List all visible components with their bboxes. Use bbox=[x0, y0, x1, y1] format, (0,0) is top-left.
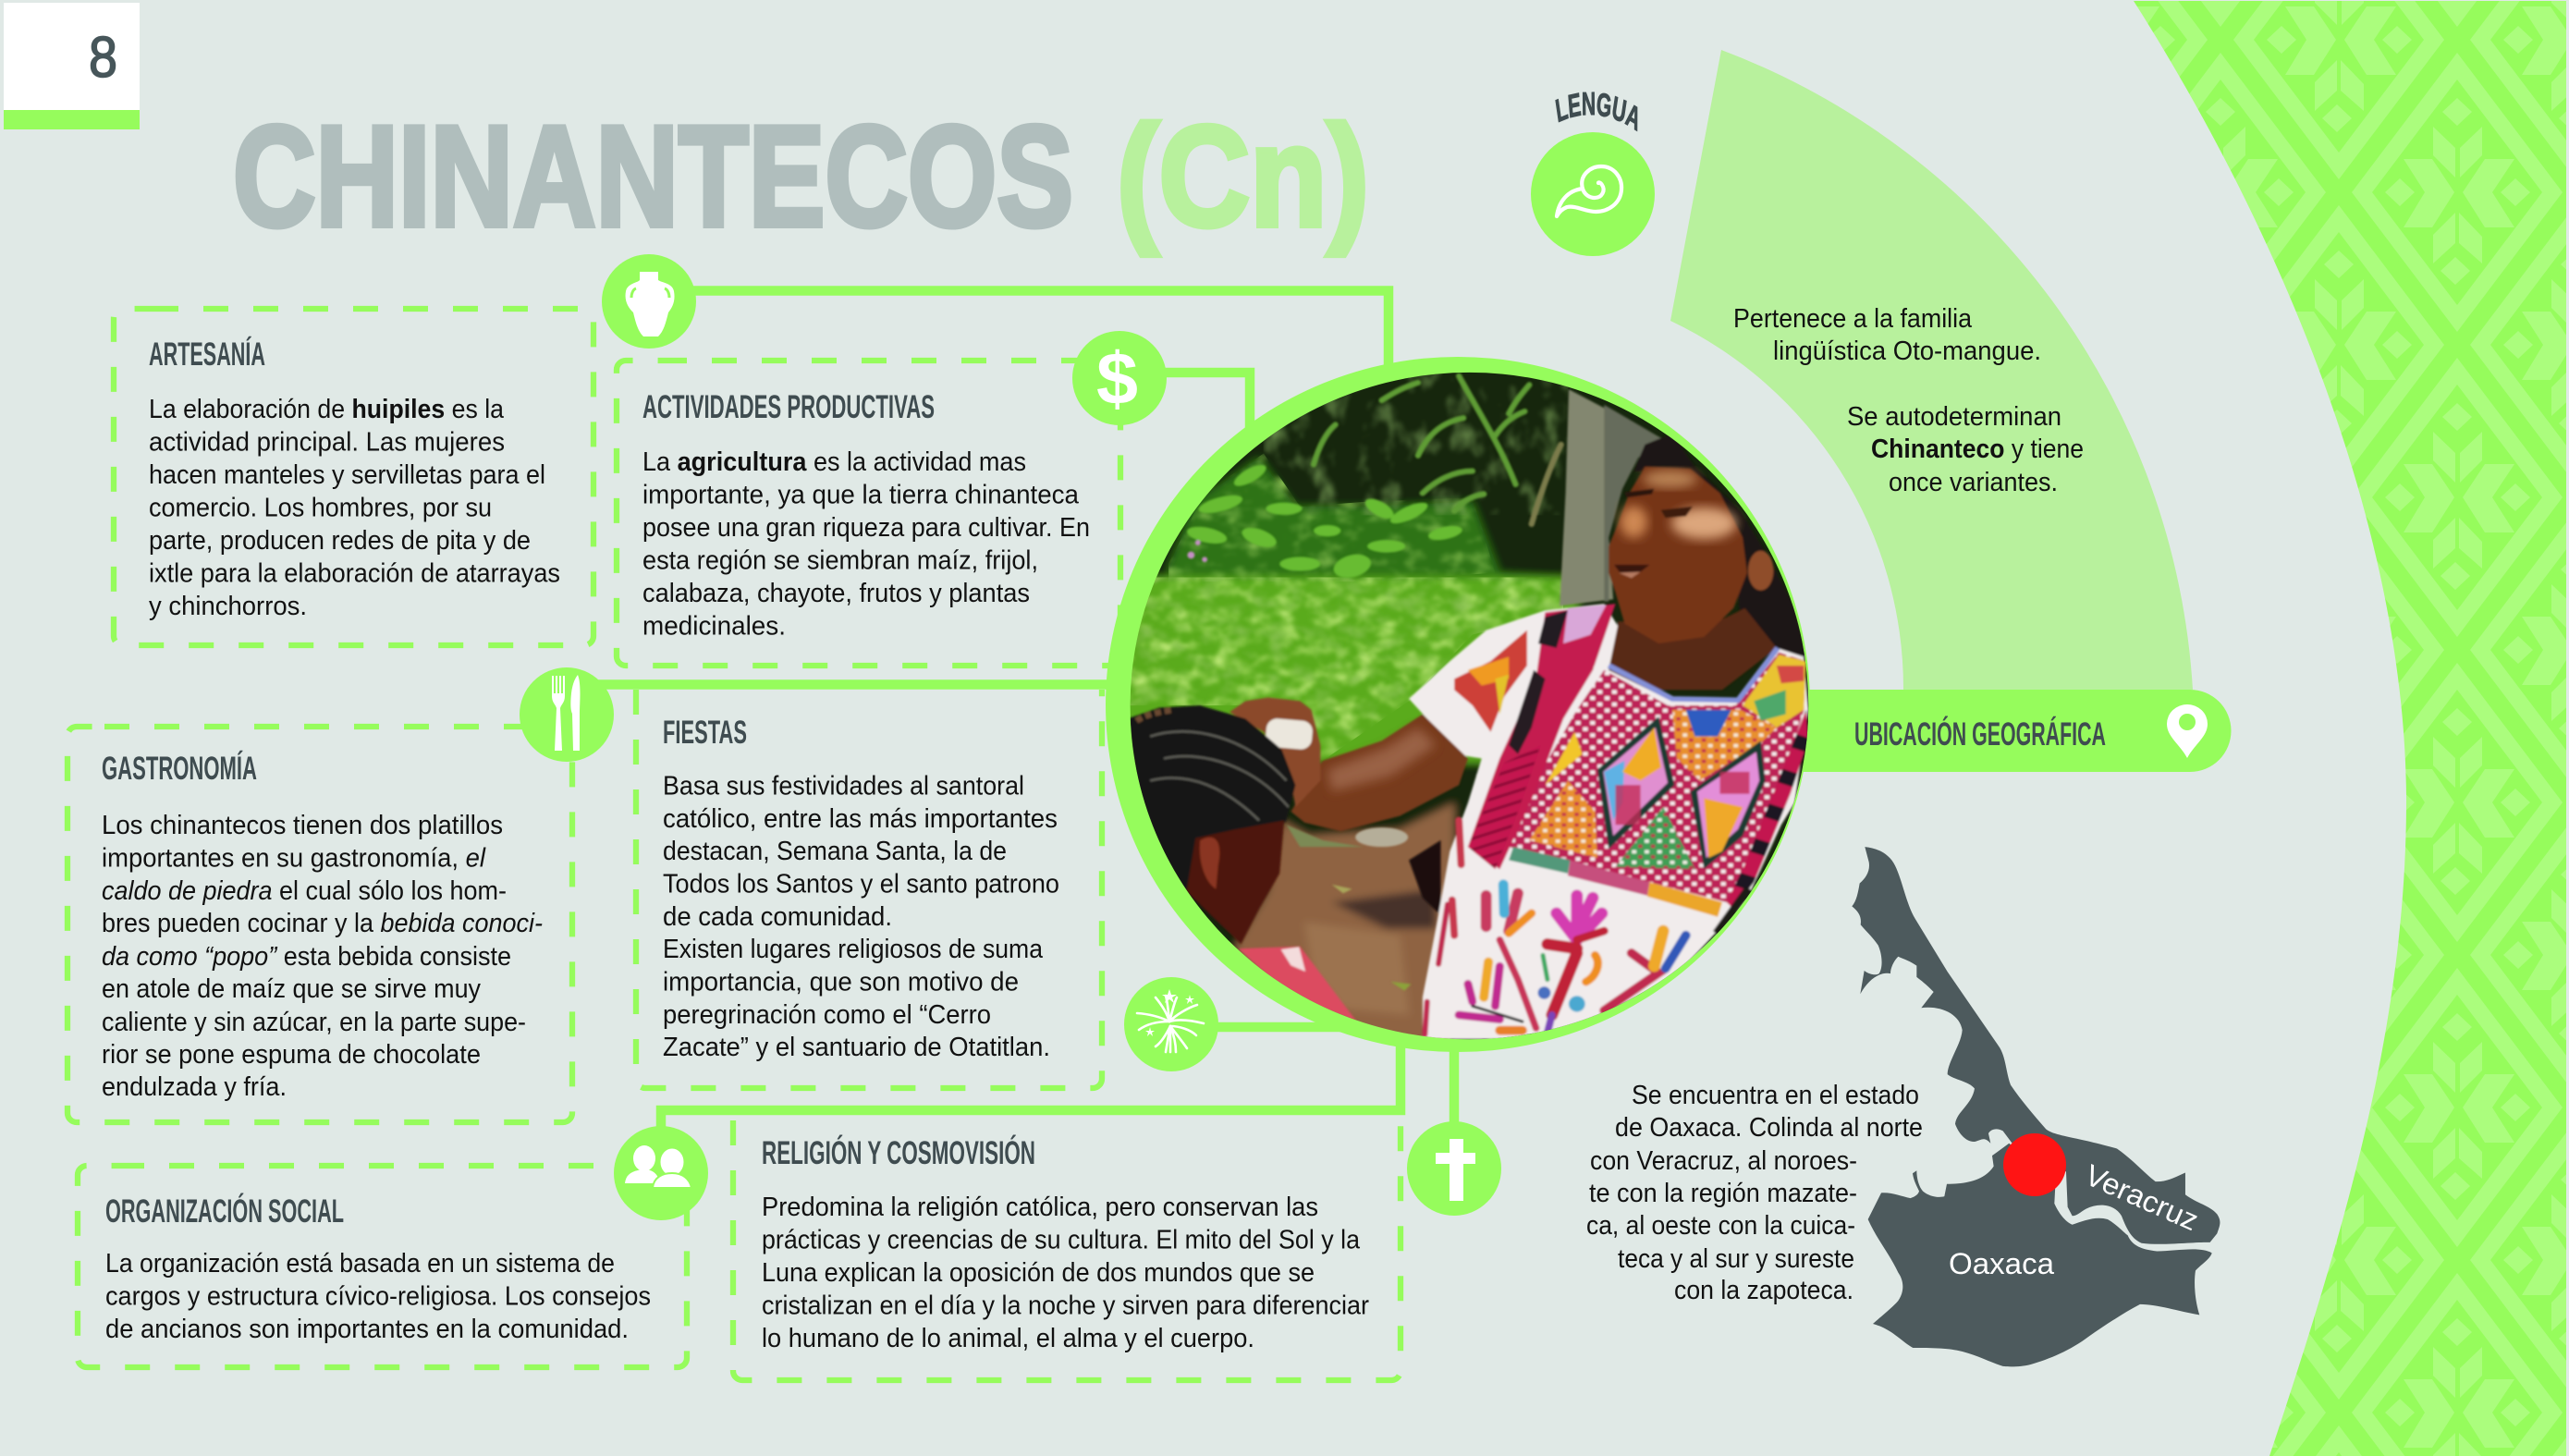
panel: fiestas bbox=[636, 690, 1102, 1088]
text: ubicación: ca, al oeste con la cuica- bbox=[1586, 1211, 1855, 1241]
ubicación geográfica pill: UBICACIÓN GEOGRÁFICA bbox=[1854, 716, 2106, 752]
panel: gastronomía: da como “popo” esta bebida consiste bbox=[102, 942, 511, 972]
icon: vase bbox=[602, 254, 696, 349]
map: Oaxaca and Veracruz bbox=[1852, 847, 2220, 1366]
text: lengua bbox=[1733, 304, 2084, 497]
text: lengua: lingüística Oto-mangue. bbox=[1773, 336, 2041, 366]
map marker bbox=[2003, 1133, 2066, 1196]
concrete post bbox=[1560, 389, 1661, 606]
panel: gastronomía: GASTRONOMÍA bbox=[102, 750, 257, 787]
panel: lengua arc bbox=[1670, 50, 2193, 690]
panel: artesanía: La elaboración de huipiles es la bbox=[149, 395, 505, 424]
panel: gastronomía bbox=[67, 727, 572, 1122]
leaves bbox=[1185, 461, 1463, 581]
page number tab bbox=[4, 3, 140, 129]
panel: organización social: de ancianos son importantes en la comunidad. bbox=[105, 1315, 629, 1344]
page number tab: 8 bbox=[89, 26, 117, 90]
panel: artesanía: comercio. Los hombres, por su bbox=[149, 494, 492, 523]
title: CHINANTECOS bbox=[233, 96, 1073, 256]
text: lengua: Se autodeterminan bbox=[1847, 402, 2061, 432]
panel: religión y cosmovisión: Luna explican la oposición de dos mundos que se bbox=[762, 1258, 1315, 1288]
panel: artesanía: actividad principal. Las mujeres bbox=[149, 427, 505, 457]
hand bbox=[1229, 697, 1320, 807]
text: ubicación bbox=[1586, 1081, 1923, 1305]
text: ubicación: con Veracruz, al noroes- bbox=[1590, 1146, 1857, 1176]
icon: cross bbox=[1407, 1121, 1501, 1216]
woman face bbox=[1609, 467, 1747, 643]
panel: organización social: ORGANIZACIÓN SOCIAL bbox=[105, 1193, 344, 1230]
icon: people bbox=[614, 1126, 708, 1220]
panel: religión y cosmovisión: prácticas y creencias de su cultura. El mito del Sol y la bbox=[762, 1226, 1361, 1255]
panel: religión y cosmovisión: RELIGIÓN Y COSMOVISIÓN bbox=[762, 1134, 1035, 1171]
icon: dollar sign bbox=[1072, 331, 1167, 425]
text: lengua: Pertenece a la familia bbox=[1733, 304, 1973, 334]
panel: religión y cosmovisión: cristalizan en el día y la noche y sirven para diferenciar bbox=[762, 1291, 1369, 1320]
panel: gastronomía: caliente y sin azúcar, en la parte supe- bbox=[102, 1008, 526, 1037]
panel: fiestas: Todos los Santos y el santo patrono bbox=[663, 869, 1059, 899]
woven pattern band bbox=[2134, 1, 2566, 1456]
panel: artesanía: ARTESANÍA bbox=[149, 336, 265, 373]
stones and objects on the ground bbox=[1355, 827, 1408, 847]
panel: gastronomía: importantes en su gastronomía, el bbox=[102, 843, 486, 873]
text: ubicación: teca y al sur y sureste bbox=[1618, 1244, 1854, 1274]
text: lengua: once variantes. bbox=[1889, 468, 2058, 497]
icon: dollar sign: $ bbox=[1096, 337, 1138, 420]
panel: fiestas: Zacate” y el santuario de Otatitlan. bbox=[663, 1033, 1050, 1062]
huipil base bbox=[1409, 604, 1808, 1039]
icon: location pin bbox=[2167, 704, 2208, 758]
panel: fiestas: católico, entre las más importantes bbox=[663, 804, 1058, 834]
panel: actividades productivas: medicinales. bbox=[642, 612, 786, 642]
panel: fiestas: Existen lugares religiosos de suma bbox=[663, 935, 1044, 964]
panel: gastronomía: rior se pone espuma de chocolate bbox=[102, 1040, 481, 1070]
icon: fork and knife bbox=[520, 667, 614, 762]
text: ubicación: Se encuentra en el estado bbox=[1632, 1081, 1919, 1110]
map label: Oaxaca: Oaxaca bbox=[1949, 1247, 2054, 1280]
panel: artesanía: y chinchorros. bbox=[149, 592, 307, 621]
woman hair bbox=[1633, 434, 1806, 656]
panel: religión y cosmovisión: Predomina la religión católica, pero conservan las bbox=[762, 1193, 1318, 1222]
lower embroidered flowers bbox=[1425, 820, 1686, 1034]
panel: fiestas: FIESTAS bbox=[663, 715, 747, 751]
sleeve embroidery bbox=[1454, 630, 1527, 732]
embroidered yoke bbox=[1509, 653, 1806, 902]
mid foliage mottling bbox=[1168, 453, 1499, 586]
panel: gastronomía: caldo de piedra el cual sólo los hom- bbox=[102, 876, 507, 906]
panel: actividades productivas: esta región se siembran maíz, frijol, bbox=[642, 545, 1038, 575]
panel: artesanía: ixtle para la elaboración de atarrayas bbox=[149, 558, 560, 588]
map label: Veracruz: Veracruz bbox=[2080, 1158, 2204, 1237]
icon: lengua swirl bbox=[1531, 132, 1655, 256]
panel: artesanía bbox=[114, 309, 593, 645]
panel: fiestas: importancia, que son motivo de bbox=[663, 967, 1019, 997]
panel: organización social bbox=[78, 1166, 687, 1367]
panel: actividades productivas: ACTIVIDADES PRODUCTIVAS bbox=[642, 389, 935, 425]
panel: organización social: cargos y estructura cívico-religiosa. Los consejos bbox=[105, 1281, 651, 1311]
panel: fiestas: Basa sus festividades al santoral bbox=[663, 771, 1024, 801]
woman neck bbox=[1609, 608, 1777, 690]
text: ubicación: de Oaxaca. Colinda al norte bbox=[1615, 1113, 1923, 1143]
panel: actividades productivas bbox=[617, 361, 1120, 666]
panel: fiestas: peregrinación como el “Cerro bbox=[663, 1000, 991, 1030]
panel: actividades productivas: La agricultura es la actividad mas bbox=[642, 447, 1026, 477]
photo: woman with embroidered huipil bbox=[1123, 365, 1817, 1046]
icon: fireworks bbox=[1124, 977, 1218, 1071]
ubicación geográfica pill bbox=[1756, 690, 2232, 772]
panel: organización social: La organización está basada en un sistema de bbox=[105, 1249, 615, 1279]
lengua heading: LENGUA bbox=[1555, 92, 1638, 131]
panel: artesanía: parte, producen redes de pita y de bbox=[149, 526, 531, 556]
panel: gastronomía: bres pueden cocinar y la bebida conoci- bbox=[102, 909, 543, 938]
text: ubicación: te con la región mazate- bbox=[1589, 1179, 1857, 1208]
panel: gastronomía: en atole de maíz que se sirve muy bbox=[102, 974, 481, 1004]
connector lines bbox=[592, 290, 1454, 1146]
panel: religión y cosmovisión: lo humano de lo animal, el alma y el cuerpo. bbox=[762, 1324, 1254, 1353]
panel: gastronomía: endulzada y fría. bbox=[102, 1072, 287, 1102]
forearm bbox=[1291, 715, 1468, 831]
text: lengua: Chinanteco y tiene bbox=[1871, 434, 2084, 464]
photo ring bbox=[1106, 357, 1810, 1052]
dark foliage flecks bbox=[1264, 370, 1568, 515]
panel: fiestas: de cada comunidad. bbox=[663, 902, 892, 932]
seated person bbox=[1128, 705, 1295, 936]
panel: religión y cosmovisión bbox=[733, 1113, 1401, 1380]
backdrop tones bbox=[1123, 365, 1817, 1046]
text: ubicación: con la zapoteca. bbox=[1674, 1276, 1853, 1305]
title: (Cn) bbox=[1117, 96, 1369, 256]
panel: fiestas: destacan, Semana Santa, la de bbox=[663, 837, 1007, 866]
shoulder sash bbox=[1468, 604, 1616, 869]
panel: actividades productivas: importante, ya que la tierra chinanteca bbox=[642, 481, 1080, 510]
grass mottling bbox=[1130, 577, 1563, 758]
panel: gastronomía: Los chinantecos tienen dos platillos bbox=[102, 811, 503, 840]
panel: actividades productivas: posee una gran riqueza para cultivar. En bbox=[642, 513, 1090, 543]
foliage strokes bbox=[1314, 376, 1561, 524]
panel: actividades productivas: calabaza, chayote, frutos y plantas bbox=[642, 579, 1030, 608]
embroidered bands bbox=[1509, 847, 1570, 874]
held object bbox=[1265, 717, 1314, 751]
panel: artesanía: hacen manteles y servilletas para el bbox=[149, 460, 545, 490]
